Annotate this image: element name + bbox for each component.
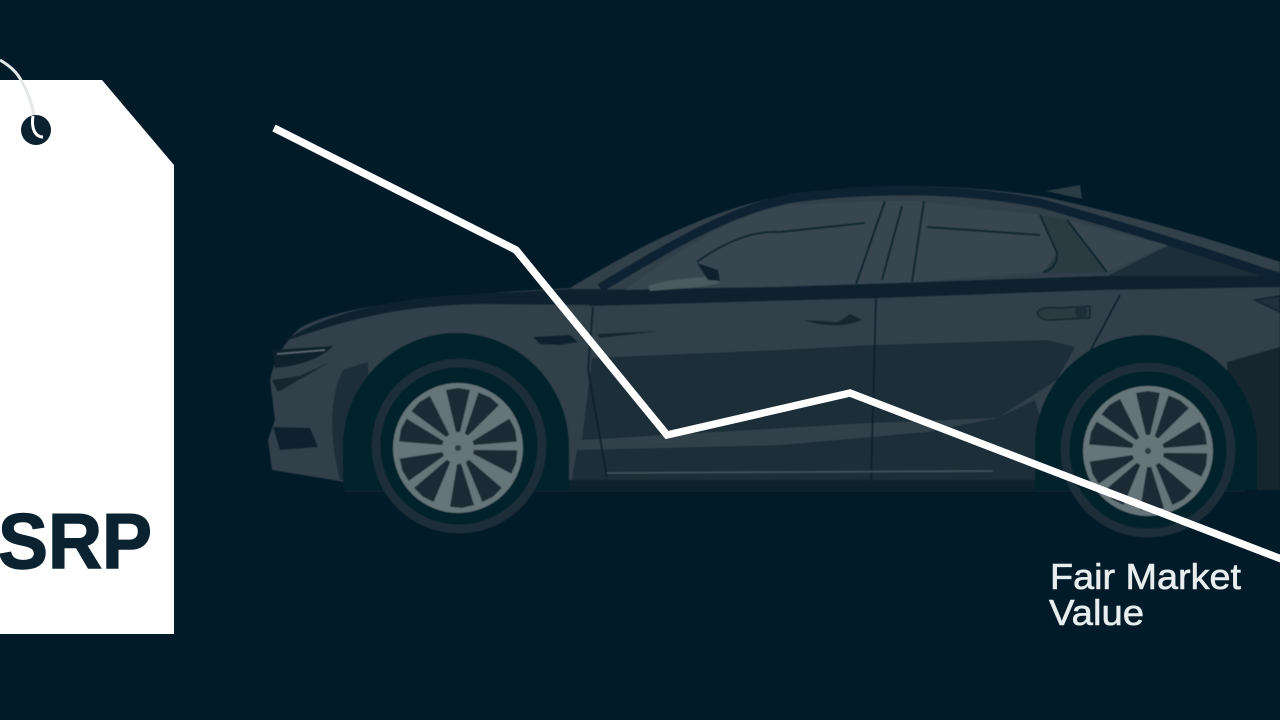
car body silhouette	[268, 185, 1280, 492]
tag string	[0, 60, 34, 116]
front wheel arch	[343, 333, 569, 490]
side mirror	[648, 263, 720, 291]
fair market value label	[1049, 556, 1241, 633]
car illustration	[268, 185, 1280, 533]
tag hole	[21, 115, 51, 145]
headlight and grille	[272, 346, 333, 450]
tag label: SRP	[0, 497, 152, 585]
tag shape	[0, 80, 174, 634]
car windows	[625, 201, 1167, 290]
rear wheel arch	[1035, 335, 1257, 490]
price trend line	[274, 128, 1280, 560]
price tag	[0, 60, 174, 634]
fair market value label: Value	[1049, 592, 1144, 633]
rear wheel	[1065, 367, 1231, 533]
front wheel	[376, 363, 542, 529]
door handles and panel lines	[533, 295, 1280, 480]
fair market value label: Fair Market	[1050, 556, 1241, 597]
